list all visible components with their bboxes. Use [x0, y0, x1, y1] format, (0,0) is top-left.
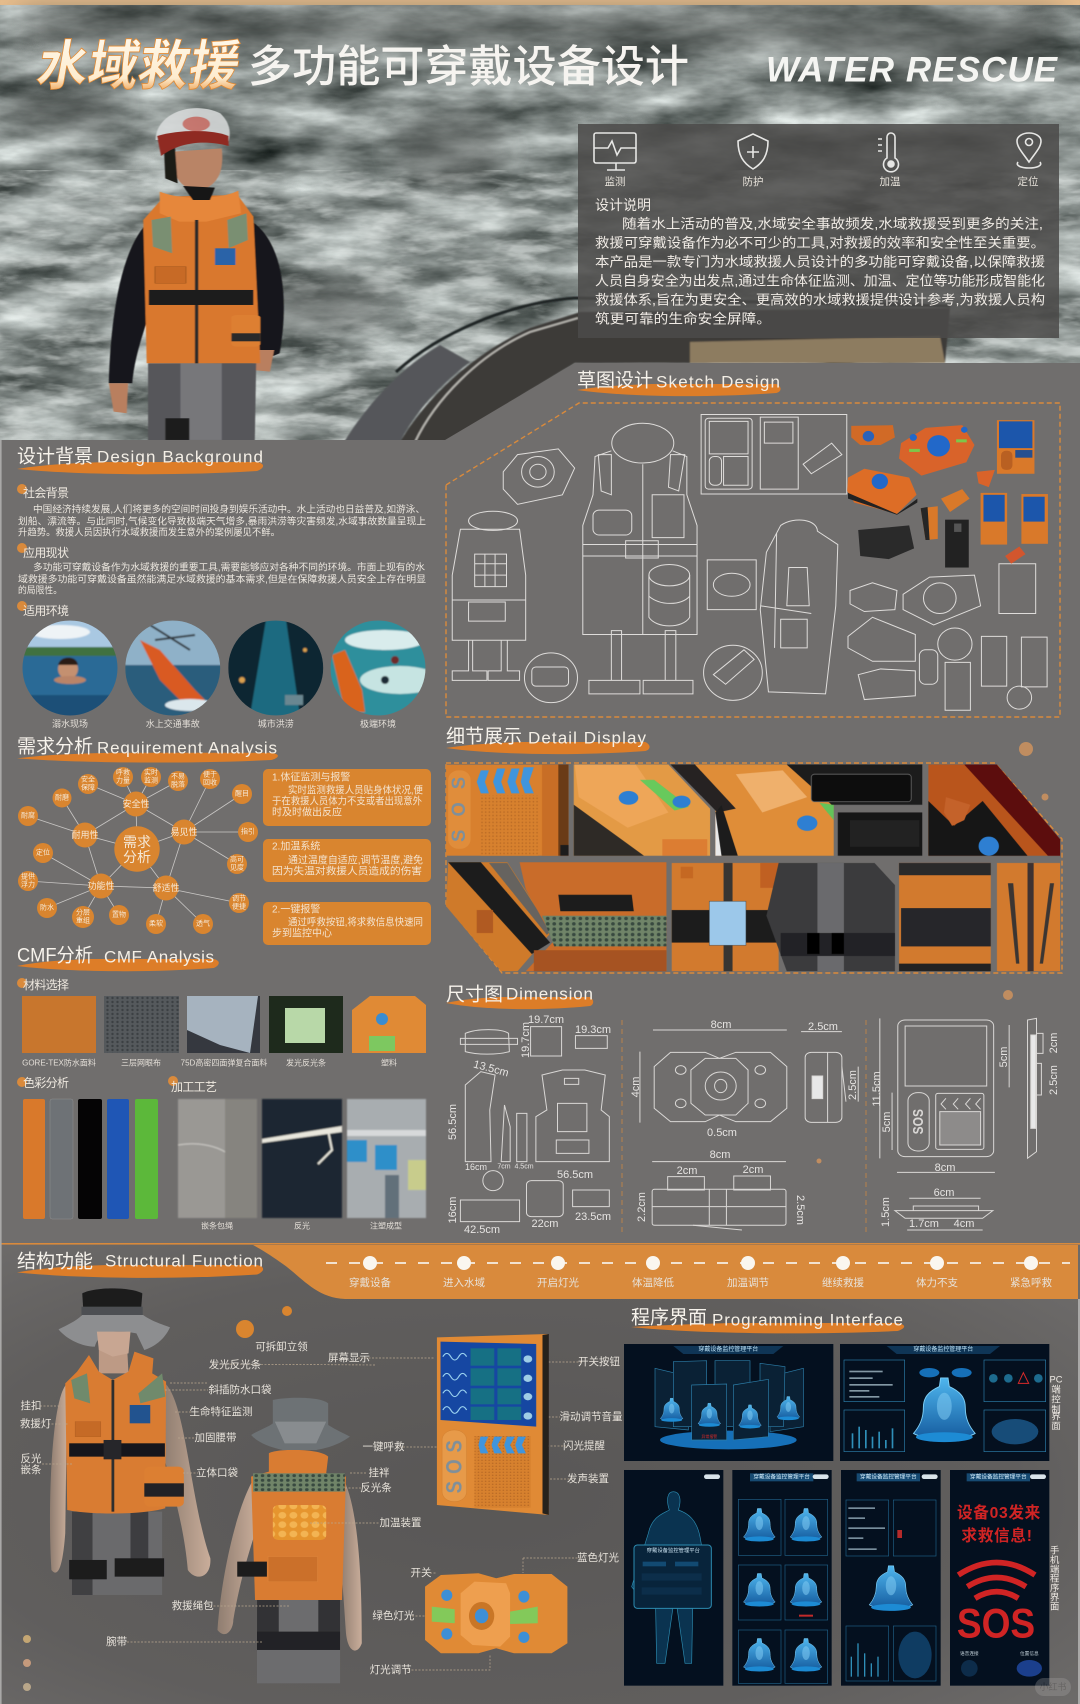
side vest sketch [704, 520, 838, 700]
hero figure: rescuer in vest [109, 108, 284, 440]
screen: device detail: 穿戴设备监控管理平台 [860, 1472, 917, 1480]
leaf labels: 呼救 [116, 768, 130, 776]
figure labels: 绿色灯光 [372, 1609, 415, 1622]
dimension labels: 19.7cm [520, 1022, 532, 1058]
block: colour analysis: 色彩分析 [23, 1076, 69, 1090]
dimension labels: 19.7cm [528, 1014, 564, 1026]
dimension labels: 16cm [447, 1197, 459, 1223]
swatch captions: GORE-TEX防水面料 [22, 1058, 96, 1068]
block: processing craft [168, 1076, 426, 1230]
label: mobile interface [1050, 1545, 1060, 1612]
swatch captions: 塑料 [381, 1058, 397, 1068]
figure labels: 嵌条 [20, 1463, 42, 1476]
leaf labels: 指引 [241, 826, 255, 836]
label: mobile interface: 程 [1050, 1574, 1059, 1584]
block: social background: 升趋势。救援人员因执行水域救援而发生意外的案例屡见不鲜。 [18, 526, 280, 538]
sos footer: 位置信息 [1020, 1650, 1039, 1657]
dimension labels: 6cm [934, 1187, 954, 1199]
block: social background [17, 484, 427, 538]
description body: 救援体系,旨在为更安全、更高效的水域救援提供设计参考,为救援人员构 [595, 292, 1045, 308]
block: social background: 划船、漂流等。与此同时,气候变化导致极端天气增多,暴雨洪涝等灾害频发,水域事故数量呈现上 [18, 516, 427, 528]
block: current status [17, 543, 427, 596]
dimension labels: 7cm [497, 1164, 511, 1170]
dimension labels: 2.5cm [847, 1070, 859, 1100]
dimension labels: 19.3cm [575, 1024, 611, 1036]
figure labels: 滑动调节音量 [560, 1410, 623, 1423]
label: mobile interface: 机 [1050, 1554, 1060, 1565]
heading: detail display: Detail Display [528, 728, 646, 748]
card: one-key alarm: 通过呼救按钮,将求救信息快速同 [288, 916, 423, 928]
figure labels: 生命特征监测 [190, 1405, 252, 1418]
leaf labels: 提供 [21, 872, 35, 880]
dimension labels: 8cm [711, 1019, 731, 1031]
flow labels [349, 1276, 1052, 1289]
label: pc interface: PC [1050, 1374, 1063, 1384]
dimension labels: 8cm [935, 1162, 955, 1174]
flow labels: 进入水域 [443, 1276, 485, 1289]
label: pc interface: 面 [1051, 1421, 1061, 1431]
figure labels: 闪光提醒 [563, 1439, 605, 1452]
figure labels: 反光 [20, 1452, 42, 1465]
label: mobile interface: 序 [1050, 1582, 1059, 1593]
photo: reflective [262, 1099, 342, 1218]
craft captions: 反光 [294, 1220, 310, 1230]
craft captions: 嵌条包绳 [201, 1220, 233, 1230]
block: applicable environments [17, 601, 440, 729]
dimension labels: 8cm [710, 1149, 730, 1161]
heading: structural function [17, 1250, 263, 1278]
figure labels: 发声装置 [567, 1472, 609, 1485]
leaf labels: 浮力 [21, 880, 35, 888]
figure labels: 可拆卸立领 [255, 1340, 308, 1353]
icon labels: 防护 [742, 175, 764, 188]
leaf labels: 耐腐 [21, 810, 35, 820]
center node: 分析 [123, 849, 151, 865]
lower right device sketches [848, 564, 1047, 710]
label: pc interface: 界 [1051, 1412, 1061, 1422]
center node: 需求 [123, 834, 151, 850]
device sketches box [503, 414, 847, 504]
dimension labels: 2.5cm [794, 1195, 806, 1225]
hub nodes [72, 792, 196, 900]
label: mobile interface: 手 [1050, 1545, 1059, 1556]
heading: programming interface: Programming Interface [712, 1310, 903, 1330]
block: material selection: 材料选择 [23, 978, 69, 992]
dimension labels [447, 1014, 1060, 1236]
detail: sos panel [446, 765, 569, 856]
screen: PC overview: 异常报警 [701, 1433, 717, 1439]
card: vital sign monitoring: 1.体征监测与报警 [272, 770, 350, 784]
leaf labels: 便捷 [232, 902, 246, 910]
card: heating system: 通过温度自适应,调节温度,避免 [288, 854, 423, 866]
description body: 随着水上活动的普及,水域安全事故频发,水域救援受到更多的关注, [622, 216, 1043, 232]
figure labels: 发光反光条 [209, 1358, 262, 1371]
figure: front view model [50, 1288, 210, 1595]
flow labels: 穿戴设备 [349, 1276, 391, 1289]
heading: sketch design [577, 370, 781, 396]
label: mobile interface: 面 [1050, 1602, 1059, 1612]
heading: programming interface [631, 1306, 904, 1333]
figure labels: 立体口袋 [196, 1466, 238, 1479]
leaf labels [21, 768, 255, 928]
card: vital sign monitoring: 时及时做出反应 [272, 806, 342, 818]
card: one-key alarm: 2.一键报警 [272, 902, 320, 916]
icon labels: 监测 [604, 175, 626, 188]
front vest sketch [583, 423, 697, 694]
screen: login [624, 1470, 723, 1686]
icon: monitor [594, 133, 636, 170]
card: vital sign monitoring: 实时监测救援人员贴身体状况,便 [288, 784, 423, 796]
card: vital sign monitoring [263, 769, 431, 826]
dimension labels: 2.5cm [808, 1021, 838, 1033]
watermark [1035, 1678, 1071, 1696]
flow labels: 紧急呼救 [1010, 1276, 1052, 1289]
title [33, 36, 1059, 96]
chart: requirement mind map [18, 767, 258, 934]
environment captions [52, 718, 396, 729]
heading: requirement analysis [17, 736, 278, 763]
detail: zip slits [997, 863, 1060, 971]
block: processing craft: 加工工艺 [171, 1080, 217, 1094]
block: applicable environments: 适用环境 [23, 603, 69, 618]
flow labels: 开启灯光 [537, 1276, 579, 1289]
leaf labels: 透气 [196, 918, 210, 928]
dimension labels: 1.7cm [909, 1218, 939, 1230]
block: current status: 域救援多功能可穿戴设备虽然能满足水域救援的基本需求,但是在保障救援人员安全上存在明显 [18, 574, 427, 586]
heading: cmf analysis: CMF Analysis [104, 948, 214, 966]
dimension labels: 16cm [465, 1162, 487, 1172]
heading: cmf analysis: CMF分析 [17, 944, 93, 966]
heading: dimension: 尺寸图 [446, 984, 503, 1006]
leaf labels: 高可 [230, 854, 244, 864]
heading: detail display [446, 726, 650, 754]
icon: shield [738, 134, 768, 169]
dimension: lamp device [640, 1030, 858, 1230]
dimension: vest patterns [460, 1027, 609, 1222]
swatch: reflective strip [269, 996, 343, 1053]
dimension: control panel: SOS [910, 1109, 926, 1134]
panel: detail display [446, 763, 1062, 973]
device: lamp [425, 1573, 567, 1653]
card: heating system: 2.加温系统 [272, 840, 320, 852]
heading: sketch design: 草图设计 [577, 370, 653, 392]
sketches: coloured devices [847, 420, 1048, 568]
description body: 筑更可靠的生命安全屏障。 [595, 310, 771, 326]
icon: thermometer [878, 133, 898, 172]
heading: sketch design: Sketch Design [656, 372, 780, 392]
dimension labels: 2cm [743, 1164, 763, 1176]
card: one-key alarm: 步到监控中心 [272, 926, 332, 940]
hub labels: 易见性 [170, 826, 198, 837]
leaf labels: 实时 [144, 768, 158, 776]
environment captions: 水上交通事故 [146, 718, 200, 729]
screen: PC overview: 穿戴设备监控管理平台 [698, 1345, 758, 1353]
label: pc interface [1050, 1374, 1063, 1431]
figure labels: 加固腰带 [194, 1432, 236, 1444]
icon: signal arcs [958, 1562, 1035, 1598]
dimension labels: 0.5cm [707, 1127, 737, 1139]
block: social background: 中国经济持续发展,人们将更多的空间时间投身到娱乐活动中。水上活动也日益普及,如游泳、 [33, 504, 425, 516]
leaf nodes [18, 767, 258, 934]
flow labels: 继续救援 [822, 1276, 864, 1289]
device: control panel [437, 1334, 549, 1515]
screen: device detail [841, 1470, 941, 1686]
screen: sos alert: 穿戴设备监控管理平台 [970, 1472, 1027, 1480]
detail: lamp close-up 1 [574, 765, 710, 856]
heading: detail display: 细节展示 [446, 726, 522, 748]
card: vital sign monitoring: 于在救援人员体力不支或者出现意外 [272, 794, 422, 808]
heading: cmf analysis [17, 944, 219, 971]
top stripe [0, 0, 1080, 5]
description heading: 设计说明 [595, 197, 651, 213]
craft captions [201, 1220, 402, 1230]
photo: drowning scene [20, 620, 120, 720]
detail: leg straps [766, 863, 895, 971]
photo: piping [178, 1099, 257, 1218]
sos footer [960, 1650, 1042, 1677]
environment captions: 极端环境 [360, 718, 396, 729]
leaf labels: 防水 [40, 902, 54, 912]
figure labels [20, 1340, 623, 1676]
leaf labels: 耐磨 [55, 792, 69, 802]
block: current status: 应用现状 [23, 545, 69, 560]
dimension labels: 1.5cm [880, 1197, 892, 1227]
flow nodes [363, 1256, 1038, 1270]
card: one-key alarm [263, 902, 431, 945]
figure labels: 开关按钮 [578, 1355, 620, 1368]
figure labels: 挂扣 [20, 1399, 42, 1412]
leaf labels: 柔软 [149, 918, 163, 928]
heading: structural function: 结构功能 [17, 1250, 93, 1272]
screen: sos alert: 求救信息! [961, 1526, 1032, 1545]
leaf labels: 保障 [81, 782, 95, 792]
hub labels [71, 798, 198, 893]
swatch: 75D fabric [187, 996, 260, 1053]
detail: belt buckle [672, 863, 779, 971]
environment captions: 城市洪涝 [258, 718, 294, 729]
dimension labels: 4cm [630, 1077, 642, 1097]
boat hull [344, 298, 950, 442]
swatch captions: 发光反光条 [286, 1058, 326, 1068]
back vest sketch [452, 511, 577, 703]
lower section background [0, 1244, 1080, 1704]
description body: 救援可穿戴设备作为必不可少的工具,对救援的效率和安全性至关重要。 [595, 234, 1045, 250]
dimension labels: 56.5cm [557, 1169, 593, 1181]
screen: PC overview [624, 1344, 833, 1461]
figure labels: 灯光调节 [370, 1663, 412, 1676]
dimension labels: 11.5cm [871, 1071, 883, 1107]
screen: device list: 穿戴设备监控管理平台 [753, 1472, 810, 1480]
dimension labels: 2.2cm [636, 1192, 648, 1222]
dimension labels: 13.5cm [472, 1059, 510, 1079]
detail: switch edge [446, 862, 552, 971]
label: pc interface: 控 [1051, 1393, 1061, 1404]
leaf labels: 安全 [81, 774, 95, 784]
figure labels: 一键呼救 [362, 1440, 405, 1453]
dimension labels: 5cm [881, 1112, 893, 1132]
grey main panel [0, 363, 1080, 1244]
hub labels: 耐用性 [71, 829, 99, 840]
icon labels: 加温 [880, 176, 901, 188]
photo: urban flooding [228, 620, 324, 716]
photo: extreme environment [330, 620, 426, 716]
photo: water traffic accident [125, 620, 221, 720]
leaf labels: 便于 [203, 770, 217, 778]
dimension labels: 2cm [1048, 1033, 1060, 1053]
photo: injection moulding [347, 1099, 426, 1218]
dimension labels: 2.5cm [1048, 1065, 1060, 1095]
swatch captions: 75D高密四面弹复合面料 [181, 1058, 267, 1068]
alert text: 设备03发来 [957, 1503, 1041, 1522]
heading: dimension: Dimension [506, 984, 593, 1004]
leaf labels: 定位 [36, 848, 50, 856]
leaf labels: 醒目 [235, 790, 249, 798]
leaf labels: 监测 [144, 776, 158, 784]
band: usage flow [253, 1245, 1078, 1299]
screen: PC detail [840, 1344, 1049, 1461]
detail: dark straps [787, 765, 922, 856]
flow labels: 加温调节 [727, 1277, 769, 1289]
label: mobile interface: 端 [1050, 1563, 1059, 1574]
leaf labels: 调节 [232, 894, 246, 902]
card: heating system [263, 839, 431, 882]
dimension labels: 5cm [998, 1047, 1010, 1067]
dimension labels: 2cm [677, 1165, 697, 1177]
panel: sketch design [446, 403, 1060, 717]
figure labels: 反光条 [360, 1481, 392, 1494]
panel: PC interfaces [624, 1344, 1063, 1461]
watermark: 小红书 [1039, 1681, 1067, 1692]
block: current status: 多功能可穿戴设备作为水域救援的重要工具,需要能够应对各种不同的环境。市面上现有的水 [33, 562, 426, 574]
screen: PC detail: 穿戴设备监控管理平台 [913, 1345, 973, 1353]
figure labels: 挂袢 [368, 1466, 390, 1479]
figure labels: 救援灯 [20, 1417, 52, 1430]
icon labels [604, 175, 1039, 188]
environment captions: 溺水现场 [52, 718, 88, 729]
heading: design background [17, 446, 263, 474]
hub labels: 功能性 [87, 880, 115, 891]
label: pc interface: 制 [1051, 1403, 1061, 1414]
label: pc interface: 端 [1051, 1383, 1061, 1394]
flow labels: 体温降低 [632, 1276, 674, 1289]
figure: back view model [217, 1398, 362, 1683]
detail: cut corner [928, 765, 1060, 856]
swatch captions: 三层网眼布 [121, 1058, 161, 1068]
heading: design background: 设计背景 [17, 446, 93, 468]
dimension labels: 4.5cm [514, 1164, 534, 1170]
leaf labels: 不易 [171, 772, 185, 780]
title: water rescue: 水域救援 [33, 36, 245, 96]
dimension labels: 4cm [954, 1218, 974, 1230]
swatch: mesh [104, 996, 179, 1053]
figure labels: 救援绳包 [172, 1599, 214, 1612]
leaf labels: 置物 [112, 910, 126, 918]
SOS text: SOS [957, 1600, 1035, 1646]
leaf labels: 分层 [76, 908, 90, 916]
leaf labels: 力量 [116, 776, 130, 784]
dimension labels: 42.5cm [464, 1224, 500, 1236]
detail: collar mesh [520, 862, 666, 971]
craft captions: 注塑成型 [370, 1220, 402, 1230]
center node [114, 826, 160, 872]
card: heating system: 因为失温对救援人员造成的伤害 [272, 864, 422, 878]
leaf labels: 回收 [203, 778, 217, 786]
heading: design background: Design Background [97, 448, 263, 466]
figure labels: 开关 [410, 1566, 432, 1579]
description body: 本产品是一款专门为水域救援人员设计的多功能可穿戴设备,以保障救援 [595, 254, 1046, 270]
block: social background: 社会背景 [23, 485, 69, 500]
dimension labels: 23.5cm [575, 1211, 611, 1223]
description body [595, 216, 1046, 326]
heading: dimension [446, 984, 593, 1009]
swatch: gore-tex [22, 996, 96, 1053]
heading: requirement analysis: Requirement Analysis [97, 738, 277, 758]
block: colour analysis [17, 1076, 158, 1219]
sketches: line drawings [452, 414, 1047, 710]
icon labels: 定位 [1018, 175, 1039, 188]
heading: requirement analysis: 需求分析 [17, 736, 93, 758]
decorative dots lower [23, 1306, 292, 1691]
panel: mobile interfaces [624, 1470, 1060, 1686]
detail: sos panel: SOS [448, 777, 470, 842]
title: english: WATER RESCUE [766, 50, 1059, 90]
panel: dimension drawings [447, 1014, 1060, 1236]
decorative dots [816, 742, 1048, 1164]
hub labels: 舒适性 [152, 882, 180, 893]
figure labels: 斜插防水口袋 [208, 1383, 272, 1396]
swatch: plastic [352, 996, 426, 1053]
figure labels: 屏幕显示 [328, 1351, 370, 1364]
title: multi-function wearable: 多功能可穿戴设备设计 [248, 42, 689, 92]
icon: location pin [1017, 133, 1041, 168]
swatch captions [22, 1058, 397, 1068]
detail: lamp close-up 2 [671, 765, 834, 856]
detail: cylinder pocket [899, 863, 991, 971]
leaf labels: 重组 [76, 916, 90, 924]
dimension labels: 56.5cm [447, 1104, 459, 1140]
hero photo: stormy water and boat [0, 5, 1080, 442]
heading: programming interface: 程序界面 [631, 1306, 707, 1328]
device: control panel: SOS [442, 1440, 467, 1493]
dimension: control panel [880, 1018, 1043, 1230]
label: mobile interface: 界 [1050, 1592, 1059, 1602]
description body: 人员自身安全为出发点,通过生命体征监测、加温、定位等功能形成智能化 [595, 272, 1045, 288]
sos footer: 语音连接 [960, 1650, 979, 1657]
panel: design description [578, 124, 1059, 338]
block: current status: 的局限性。 [18, 584, 62, 596]
leaf labels: 见度 [230, 862, 244, 872]
heading: structural function: Structural Function [105, 1252, 263, 1270]
leaf labels: 脱落 [171, 780, 185, 788]
flow labels: 体力不支 [916, 1276, 958, 1289]
figure labels: 腕带 [106, 1635, 127, 1648]
dimension labels: 22cm [532, 1218, 558, 1230]
screen: device list [732, 1470, 832, 1686]
screen: sos alert [950, 1470, 1049, 1686]
block: material selection [17, 978, 426, 1068]
figure labels: 加温装置 [380, 1516, 422, 1529]
screen: login: 穿戴设备监控管理平台 [647, 1546, 700, 1554]
figure labels: 蓝色灯光 [577, 1551, 619, 1564]
hub labels: 安全性 [122, 798, 150, 809]
